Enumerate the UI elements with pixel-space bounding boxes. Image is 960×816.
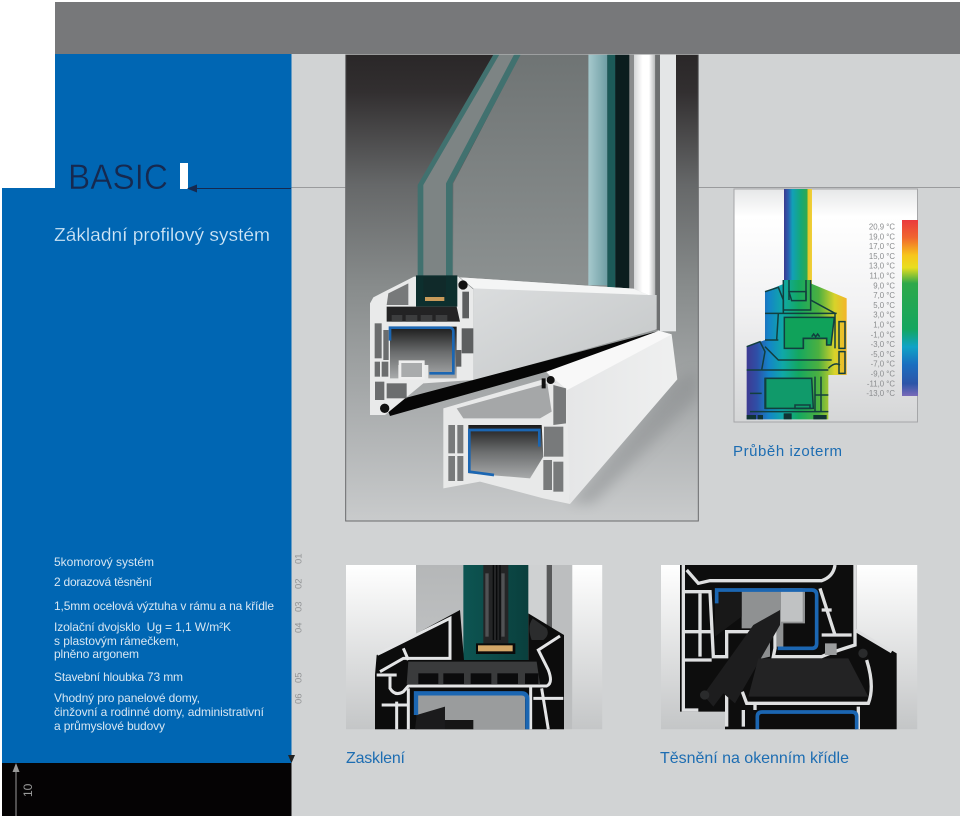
thermal scale labels: 1,0 °C bbox=[873, 320, 895, 330]
thermal scale labels: 11,0 °C bbox=[869, 272, 895, 280]
thermal scale labels: 9,0 °C bbox=[873, 281, 895, 290]
feature list bbox=[54, 555, 274, 733]
list numbers: 01 bbox=[294, 553, 304, 564]
thermal scale labels: 17,0 °C bbox=[869, 242, 895, 251]
detail photo: glazing bbox=[346, 565, 602, 729]
thermal scale labels: -3,0 °C bbox=[871, 340, 895, 349]
thermal scale labels: 3,0 °C bbox=[873, 311, 895, 320]
glazing unit bbox=[463, 565, 528, 660]
thermal scale labels: 7,0 °C bbox=[873, 291, 895, 300]
title: BASIC: BASIC bbox=[68, 158, 168, 197]
caption: sash gasket: Těsnění na okenním křídle bbox=[660, 750, 849, 767]
arrow: title pointer bbox=[187, 184, 291, 192]
subtitle: Základní profilový systém bbox=[54, 224, 270, 245]
hairline bbox=[291, 186, 960, 188]
glazing thermal column bbox=[784, 189, 812, 289]
list numbers: 04 bbox=[294, 622, 304, 633]
sill shadow bbox=[570, 370, 698, 503]
caption: glazing: Zasklení bbox=[346, 750, 406, 767]
feature list: Izolační dvojsklo Ug = 1,1 W/m²K bbox=[54, 620, 231, 634]
black footer block bbox=[2, 763, 292, 816]
thermal scale labels: 5,0 °C bbox=[873, 301, 895, 310]
thermal scale labels: -7,0 °C bbox=[871, 360, 895, 369]
thermal scale labels: 20,9 °C bbox=[869, 222, 895, 232]
blue panel bbox=[2, 54, 292, 763]
feature list: 5komorový systém bbox=[54, 555, 154, 569]
thermal scale labels: -5,0 °C bbox=[871, 350, 895, 359]
thermal scale labels bbox=[866, 222, 895, 398]
thermal scale labels: -9,0 °C bbox=[871, 370, 895, 378]
thermal profile bbox=[747, 280, 847, 419]
profile body bbox=[375, 610, 564, 729]
list numbers: 05 bbox=[294, 672, 304, 683]
profile body bbox=[680, 565, 897, 729]
thermal scale labels: -11,0 °C bbox=[867, 379, 895, 388]
feature list: Vhodný pro panelové domy, bbox=[54, 691, 200, 705]
top grey band bbox=[55, 2, 960, 54]
thermal isotherm panel bbox=[734, 189, 918, 422]
double glazing panes bbox=[418, 55, 521, 277]
page number arrow bbox=[12, 763, 20, 816]
photo border bbox=[346, 55, 698, 521]
sash white face bbox=[460, 277, 657, 381]
page number: 10 bbox=[21, 783, 35, 797]
detail photo: sash gasket bbox=[661, 565, 917, 729]
main photo: window profile cross-section bbox=[346, 55, 698, 521]
feature list: 2 dorazová těsnění bbox=[54, 575, 153, 589]
white profile walls bbox=[377, 618, 563, 729]
thermal scale labels: 19,0 °C bbox=[869, 232, 895, 241]
lower profile bbox=[443, 378, 570, 504]
white profile walls bbox=[683, 565, 892, 729]
thermal background bbox=[734, 189, 918, 422]
feature list: plněno argonem bbox=[54, 647, 139, 661]
glass cavity and pane bbox=[453, 55, 588, 285]
thermal scale labels: 13,0 °C bbox=[869, 262, 895, 271]
feature list: 1,5mm ocelová výztuha v rámu a na křídle bbox=[54, 599, 274, 613]
sill white face bbox=[546, 331, 677, 504]
thermal scale labels: -1,0 °C bbox=[871, 330, 895, 339]
feature list: s plastovým rámečkem, bbox=[54, 634, 179, 648]
upper profile bbox=[370, 277, 473, 415]
list numbers: 02 bbox=[294, 578, 304, 589]
thermal scale labels: -13,0 °C bbox=[866, 389, 895, 398]
list numbers: 03 bbox=[294, 601, 304, 612]
small down arrow bbox=[288, 755, 295, 763]
list numbers bbox=[294, 553, 304, 704]
feature list: a průmyslové budovy bbox=[54, 719, 165, 733]
inner glazing edge bbox=[588, 55, 676, 331]
feature list: Stavební hloubka 73 mm bbox=[54, 670, 183, 684]
black gasket bbox=[385, 331, 658, 416]
feature list: činžovní a rodinné domy, administrativní bbox=[54, 705, 265, 719]
caption: isotherms: Průběh izoterm bbox=[733, 443, 842, 460]
thermal scale labels: 15,0 °C bbox=[869, 252, 895, 261]
title marker bar bbox=[180, 163, 188, 189]
colour scale bar bbox=[902, 220, 918, 396]
list numbers: 06 bbox=[294, 693, 304, 704]
